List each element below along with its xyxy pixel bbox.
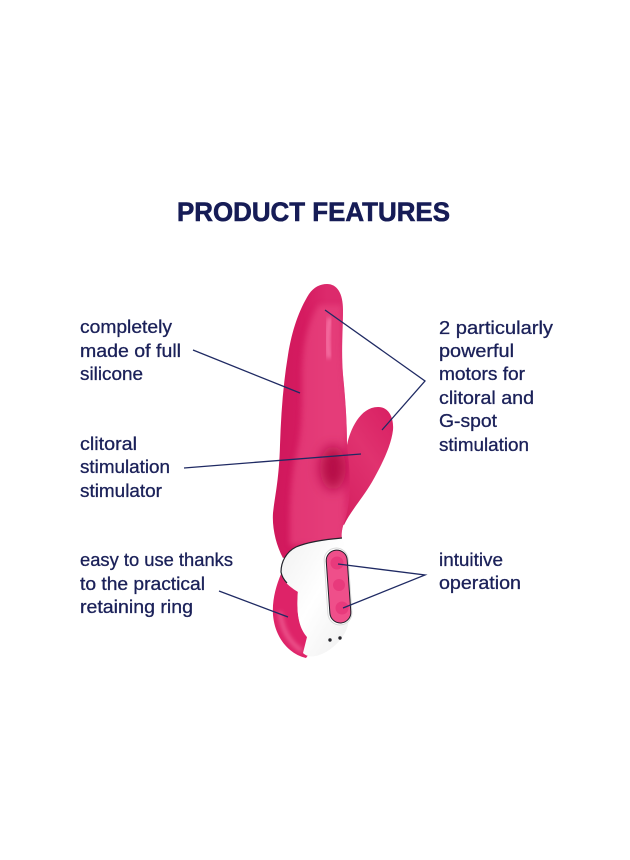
callout: retaining ring: retaining ring (80, 596, 193, 617)
callout: clitoral stimulation stimulator: stimulation (80, 456, 170, 477)
callout: intuitive operation (338, 549, 521, 608)
retaining ring (273, 570, 312, 658)
main shaft (273, 284, 350, 558)
product illustration: vibrator (273, 284, 393, 658)
callout: retaining ring: easy to use thanks (80, 549, 233, 570)
callout: completely made of full silicone: completely (80, 316, 173, 337)
callout: 2 powerful motors: powerful (439, 340, 514, 361)
callout: 2 powerful motors: G-spot (439, 410, 497, 431)
callout: 2 powerful motors: 2 particularly (439, 317, 554, 338)
callout: retaining ring: to the practical (80, 573, 205, 594)
control buttons (330, 556, 344, 570)
callout: intuitive operation: intuitive (439, 549, 503, 570)
callout: clitoral stimulation stimulator (80, 433, 361, 501)
callout: completely made of full silicone (80, 316, 300, 393)
handle dark trim (281, 538, 342, 583)
callout: 2 powerful motors (325, 310, 554, 455)
callout: 2 powerful motors: stimulation (439, 434, 529, 455)
shadow at arm junction (320, 446, 346, 490)
callout: completely made of full silicone: silicone (80, 363, 143, 384)
callout: 2 powerful motors: clitoral and (439, 387, 534, 408)
callout: completely made of full silicone: made of full (80, 340, 181, 361)
control panel (323, 547, 353, 626)
callout: intuitive operation: operation (439, 572, 521, 593)
white handle (281, 538, 350, 656)
callout: clitoral stimulation stimulator: stimulator (80, 480, 162, 501)
callout: 2 powerful motors: motors for (439, 363, 525, 384)
charging contacts (328, 638, 332, 642)
clitoral arm (310, 407, 393, 525)
callout: clitoral stimulation stimulator: clitoral (80, 433, 137, 454)
callout: retaining ring (80, 549, 288, 617)
shaft highlights (290, 305, 350, 545)
title: PRODUCT FEATURES (177, 197, 450, 227)
